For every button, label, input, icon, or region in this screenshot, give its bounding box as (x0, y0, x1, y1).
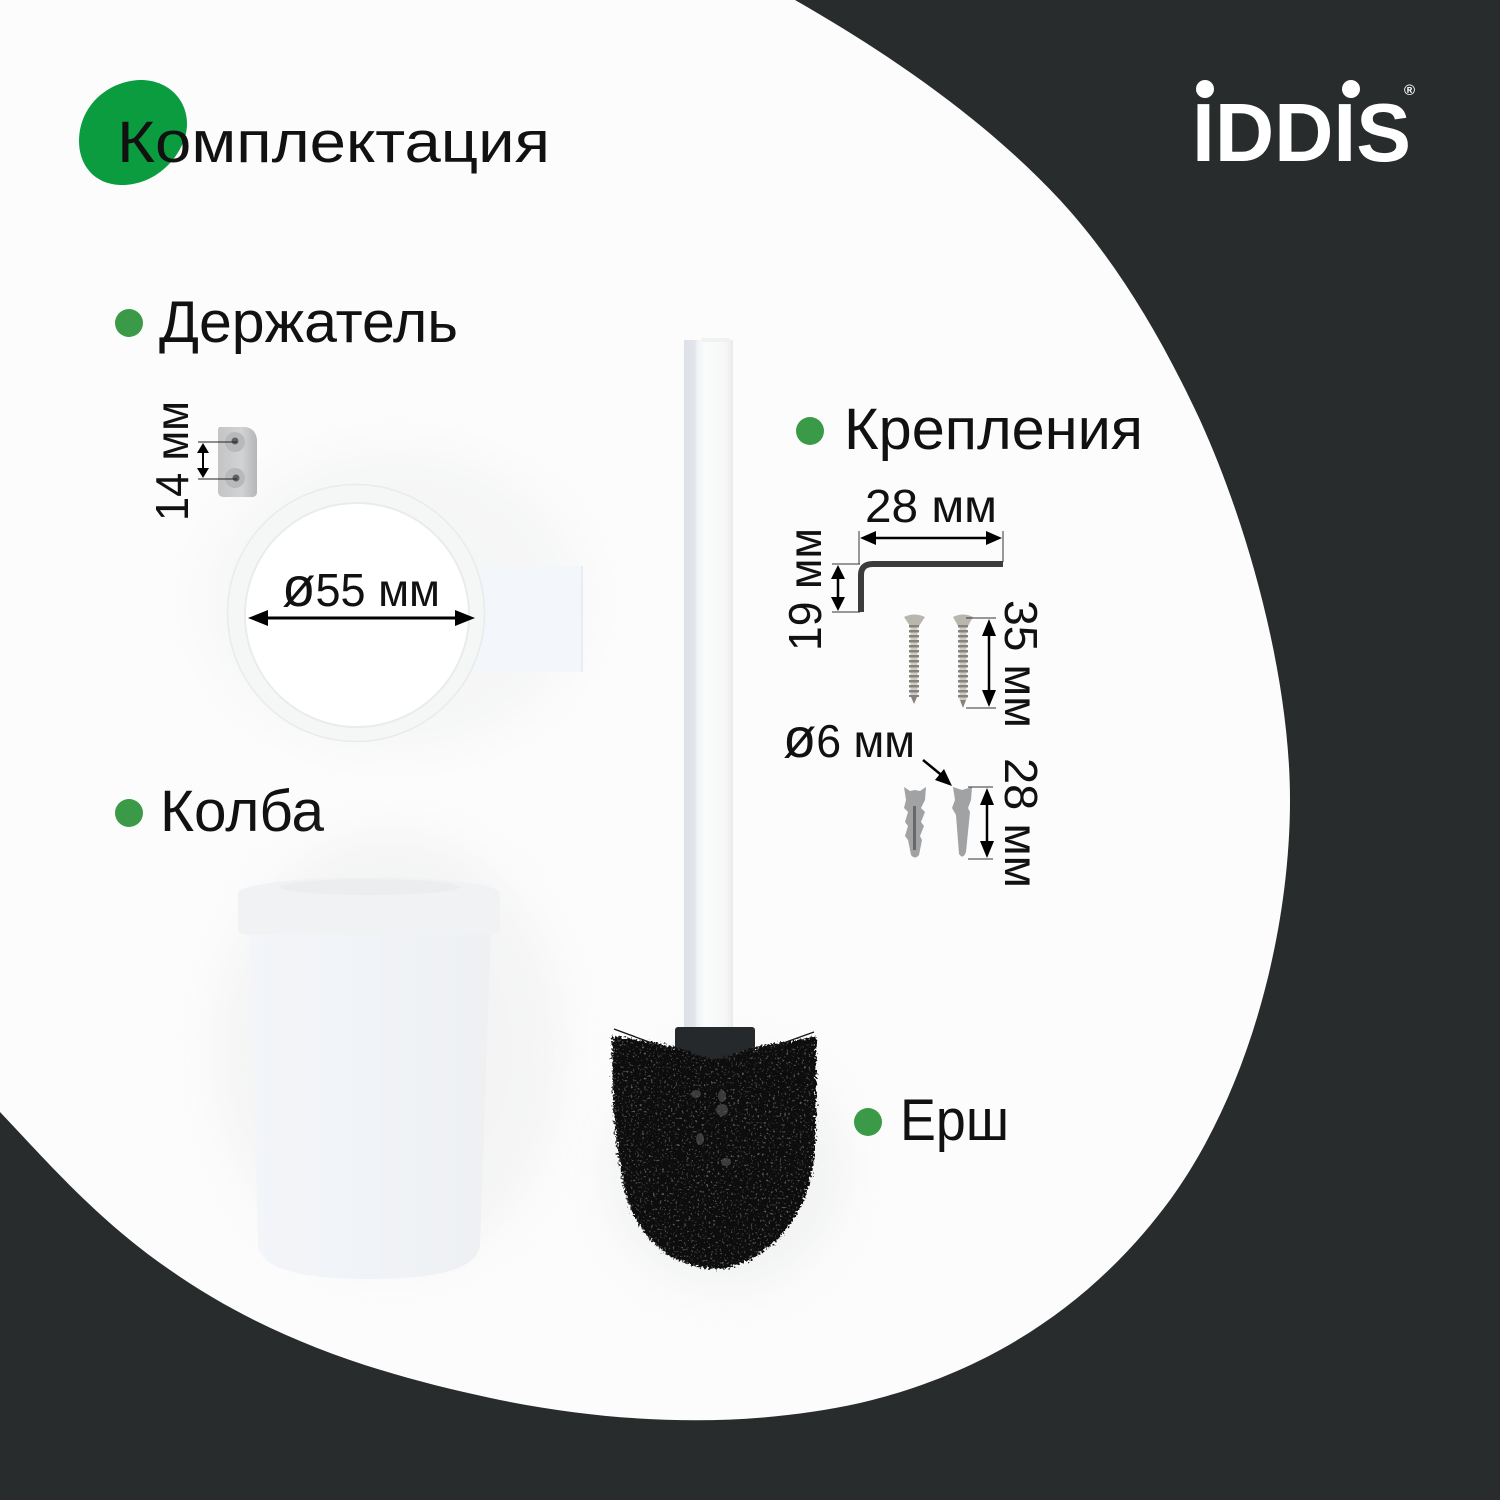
hex key (861, 564, 1003, 612)
diameter dimension: ø55 мм (282, 555, 440, 618)
wall plugs (904, 787, 972, 858)
holder arm (470, 566, 583, 672)
green blob (79, 80, 187, 185)
title with green blob (79, 80, 550, 185)
registered mark: ® (1404, 82, 1415, 99)
heading text: Комплектация (117, 110, 550, 175)
glass shadow (215, 830, 565, 1270)
diameter dimension (248, 555, 475, 626)
logo: IDDIS (1192, 80, 1415, 179)
section: brush (605, 338, 1009, 1290)
holder ring (228, 484, 484, 742)
35 mm dimension (966, 600, 1047, 728)
brush collar (675, 1027, 755, 1067)
28 mm plug dimension (968, 758, 1047, 888)
screws (904, 614, 973, 708)
brush label (854, 1088, 1009, 1153)
section: fasteners (779, 397, 1143, 888)
mounting plate (218, 427, 257, 497)
28 mm key dimension (859, 480, 1003, 564)
brush shadow (605, 1050, 845, 1290)
6 mm dimension: ø6 мм (783, 706, 915, 769)
glass label: Колба (160, 779, 325, 844)
35 mm dimension: 35 мм (995, 600, 1047, 728)
14 mm dimension: 14 мм (146, 401, 198, 521)
brush bristles (612, 1029, 816, 1269)
28 mm plug dimension: 28 мм (995, 758, 1047, 888)
6 mm dimension (783, 706, 952, 786)
section: holder (115, 290, 630, 790)
logo dots (1196, 80, 1360, 98)
brush label: Ерш (900, 1088, 1009, 1153)
19 mm key dimension: 19 мм (779, 528, 831, 651)
19 mm key dimension (779, 528, 860, 651)
28 mm key dimension: 28 мм (865, 480, 997, 532)
14 mm dimension (146, 401, 237, 521)
fasteners label: Крепления (844, 397, 1143, 462)
holder label: Держатель (159, 290, 458, 355)
section: glass (115, 779, 565, 1279)
frosted glass (238, 877, 500, 1279)
holder soft shadow (160, 410, 630, 790)
logo wordmark: IDDIS (1192, 86, 1411, 179)
brush handle (684, 338, 733, 1040)
